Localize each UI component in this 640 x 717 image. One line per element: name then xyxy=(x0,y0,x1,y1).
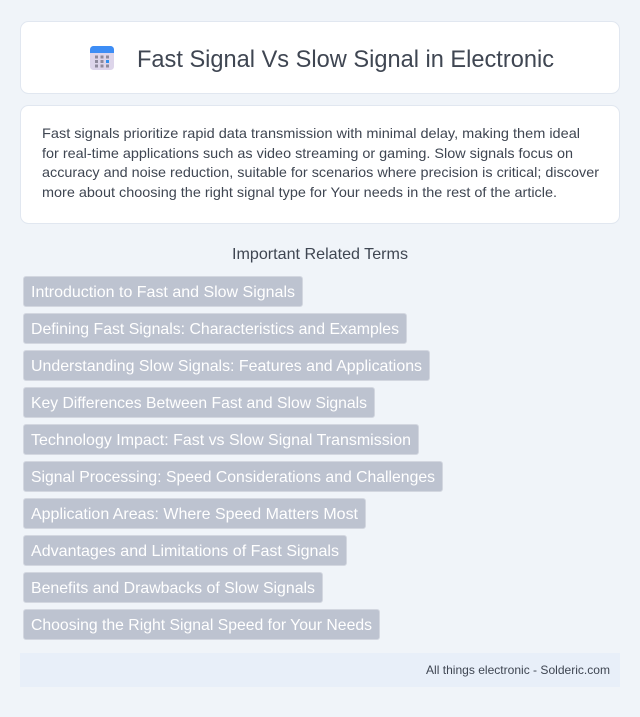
term 7: Application Areas: Where Speed Matters Most xyxy=(31,506,359,523)
list of related terms xyxy=(24,276,442,640)
term 3 xyxy=(24,350,430,380)
term 4 xyxy=(24,388,374,418)
term 10 xyxy=(24,610,380,640)
term 6 xyxy=(24,462,442,492)
term 9: Benefits and Drawbacks of Slow Signals xyxy=(31,580,315,597)
footer xyxy=(20,653,620,687)
panel: intro paragraph xyxy=(20,106,620,224)
icon: calendar xyxy=(90,46,114,70)
term 8 xyxy=(24,536,346,566)
term 9 xyxy=(24,572,322,602)
term 2 xyxy=(24,314,406,344)
term 10: Choosing the Right Signal Speed for Your Needs xyxy=(31,617,372,634)
title card xyxy=(20,22,620,94)
footer: All things electronic - Solderic.com xyxy=(426,663,610,677)
term 6: Signal Processing: Speed Considerations and Challenges xyxy=(31,469,435,486)
panel: intro paragraph: Fast signals prioritize rapid data transmission with minimal delay, making them ideal xyxy=(42,125,580,141)
title: Fast Signal Vs Slow Signal in Electronic xyxy=(137,46,554,73)
term 8: Advantages and Limitations of Fast Signals xyxy=(31,543,339,560)
term 5 xyxy=(24,424,418,454)
panel: intro paragraph: for real-time applications such as video streaming or gaming. Slow signals focus on xyxy=(42,145,573,161)
panel: intro paragraph: accuracy and noise reduction, suitable for scenarios where precision is critical; discover xyxy=(42,164,599,180)
term 1 xyxy=(24,276,302,306)
term 2: Defining Fast Signals: Characteristics and Examples xyxy=(31,321,399,338)
heading: related terms: Important Related Terms xyxy=(232,246,408,263)
term 7 xyxy=(24,498,366,528)
term 1: Introduction to Fast and Slow Signals xyxy=(31,284,295,301)
panel: intro paragraph: more about choosing the right signal type for Your needs in the rest of the article. xyxy=(42,184,557,200)
term 5: Technology Impact: Fast vs Slow Signal Transmission xyxy=(31,432,411,449)
term 3: Understanding Slow Signals: Features and Applications xyxy=(31,358,422,375)
term 4: Key Differences Between Fast and Slow Signals xyxy=(31,395,367,412)
